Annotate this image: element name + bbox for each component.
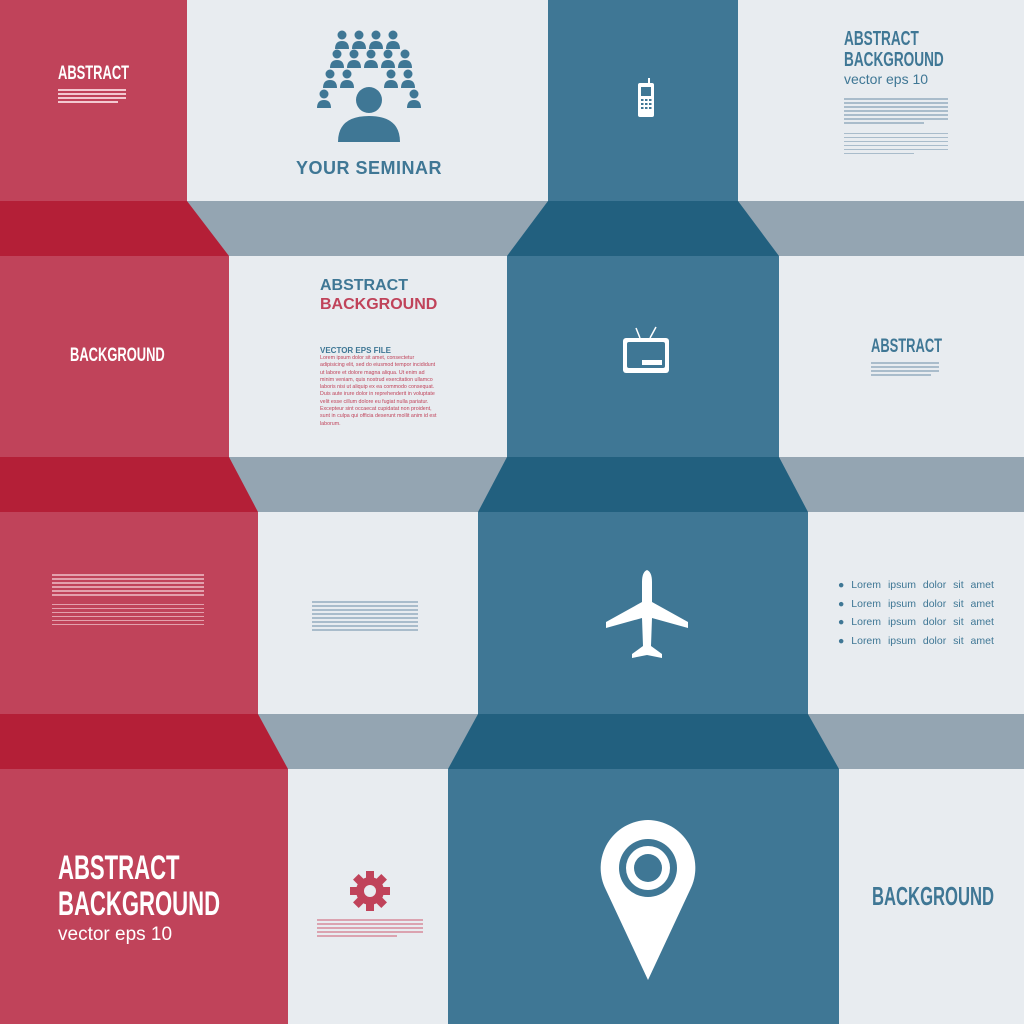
heading: abstract background bottom left: vector eps 10 [58,924,172,945]
text: abstract background top right: vector eps 10 [844,71,928,87]
text block: abstract background center: VECTOR EPS FILE [320,346,391,355]
text: abstract background top right: ABSTRACT [844,28,919,50]
heading: abstract background bottom left: ABSTRACT [58,849,180,887]
text block: abstract background center: Lorem ipsum dolor sit amet, consectetur adipisicing elit, sed do eiusmod tempor incididunt ut labore et dolore magna aliqua. Ut enim ad minim veniam, quis nostrud exercitation ullamco laboris nisi ut aliquip ex ea commodo consequat. Duis aute irure dolor in reprehenderit in voluptate velit esse cillum dolore eu fugiat nulla pariatur. Excepteur sint occaecat cupidatat non proident, sunt in culpa qui officia deserunt mollit anim id est laborum. [320,355,436,427]
bullet list: ● Lorem ipsum dolor sit amet [838,634,994,646]
text block: gear text [317,919,423,937]
icon: airplane [606,570,688,658]
bullet list: ● Lorem ipsum dolor sit amet [838,579,994,591]
text: background red: BACKGROUND [70,345,165,366]
text: background bottom right: BACKGROUND [872,881,994,911]
text block: red row3 [52,574,204,625]
heading: abstract background bottom left: BACKGROUND [58,885,220,923]
icon: gear [350,871,390,911]
text block: abstract background center: BACKGROUND [320,296,437,313]
text: abstract right row2: ABSTRACT [871,336,942,357]
text: abstract top left: ABSTRACT [58,63,129,84]
icon: seminar people [317,30,421,142]
bullet list [838,579,994,646]
text: abstract background top right [844,28,948,154]
bullet list: ● Lorem ipsum dolor sit amet [838,616,994,628]
heading: abstract background bottom left [58,849,220,945]
icon: tv [623,326,669,373]
heading: your seminar: YOUR SEMINAR [296,158,442,178]
text block: abstract background center [320,277,437,427]
icon: phone [638,78,654,117]
bullet list: ● Lorem ipsum dolor sit amet [838,598,994,610]
icon: location pin [600,820,696,980]
text: abstract background top right: BACKGROUND [844,49,944,71]
text block: center row3 [312,601,418,631]
text block: abstract background center: ABSTRACT [320,277,408,294]
